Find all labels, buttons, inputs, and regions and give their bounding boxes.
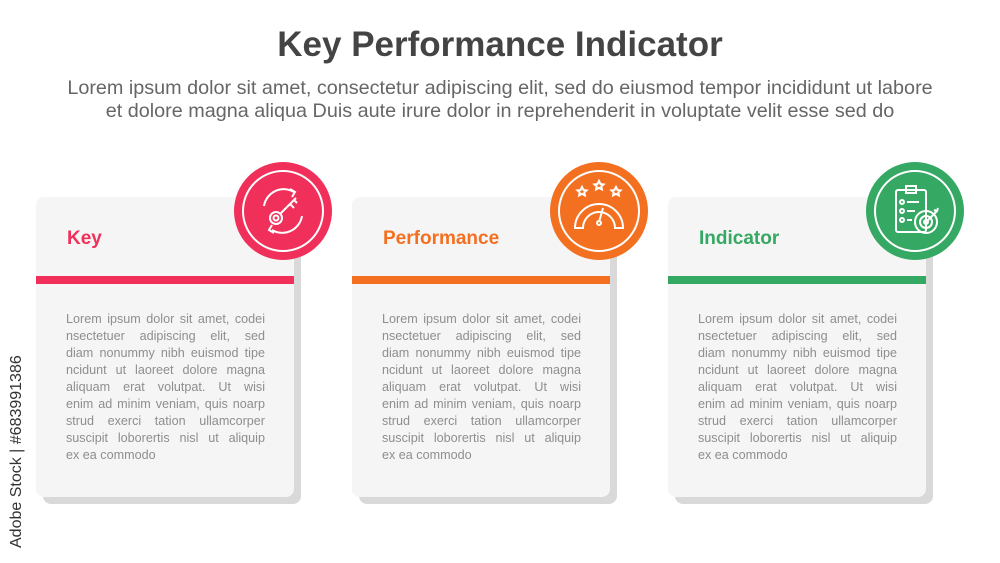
text block: indicator: aliquam erat volutpat. Ut wisi (698, 380, 897, 394)
text block: performance: ex ea commodo (382, 448, 472, 462)
text block: indicator (698, 312, 897, 462)
text block: performance: nsectetuer adipiscing elit, sed (382, 329, 581, 343)
icon: clipboard target circle (866, 162, 964, 260)
text block: indicator: Lorem ipsum dolor sit amet, codei (698, 312, 897, 326)
text block: performance: suscipit loborertis nisl ut aliquip (382, 431, 581, 445)
text block: performance: strud exerci tation ullamcorper (382, 414, 581, 428)
text block: key: enim ad minim veniam, quis noarp (66, 397, 265, 411)
icon: gauge circle (550, 162, 648, 260)
text block: key: suscipit loborertis nisl ut aliquip (66, 431, 265, 445)
text block: indicator: suscipit loborertis nisl ut aliquip (698, 431, 897, 445)
panel: key (36, 197, 301, 504)
watermark text: Adobe Stock | #683991386 (8, 355, 25, 548)
heading: indicator: Indicator (699, 228, 779, 249)
text block: indicator: enim ad minim veniam, quis noarp (698, 397, 897, 411)
text block: indicator: ex ea commodo (698, 448, 788, 462)
text block: indicator: strud exerci tation ullamcorper (698, 414, 897, 428)
text block: key: ex ea commodo (66, 448, 156, 462)
text block: key: diam nonummy nibh euismod tipe (66, 346, 265, 360)
subtitle: et dolore magna aliqua Duis aute irure dolor in reprehenderit in voluptate velit esse sed do (106, 100, 894, 122)
text block: key: nsectetuer adipiscing elit, sed (66, 329, 265, 343)
panel: performance (352, 197, 617, 504)
text block: performance: Lorem ipsum dolor sit amet, codei (382, 312, 581, 326)
text block: key (66, 312, 265, 462)
text block: key: strud exerci tation ullamcorper (66, 414, 265, 428)
text block: performance: ncidunt ut laoreet dolore magna (382, 363, 581, 377)
text block: performance (382, 312, 581, 462)
subtitle (67, 77, 933, 122)
text block: indicator: diam nonummy nibh euismod tipe (698, 346, 897, 360)
text block: key: Lorem ipsum dolor sit amet, codei (66, 312, 265, 326)
text block: performance: enim ad minim veniam, quis noarp (382, 397, 581, 411)
text block: performance: aliquam erat volutpat. Ut wisi (382, 380, 581, 394)
text block: key: aliquam erat volutpat. Ut wisi (66, 380, 265, 394)
heading: key: Key (67, 228, 102, 249)
text block: performance: diam nonummy nibh euismod tipe (382, 346, 581, 360)
heading: performance: Performance (383, 228, 499, 249)
title: Key Performance Indicator (277, 25, 723, 64)
text block: indicator: nsectetuer adipiscing elit, sed (698, 329, 897, 343)
text block: key: ncidunt ut laoreet dolore magna (66, 363, 265, 377)
icon: key circle (234, 162, 332, 260)
subtitle: Lorem ipsum dolor sit amet, consectetur adipiscing elit, sed do eiusmod tempor incididunt ut labore (67, 77, 933, 99)
text block: indicator: ncidunt ut laoreet dolore magna (698, 363, 897, 377)
panel: indicator (668, 197, 933, 504)
